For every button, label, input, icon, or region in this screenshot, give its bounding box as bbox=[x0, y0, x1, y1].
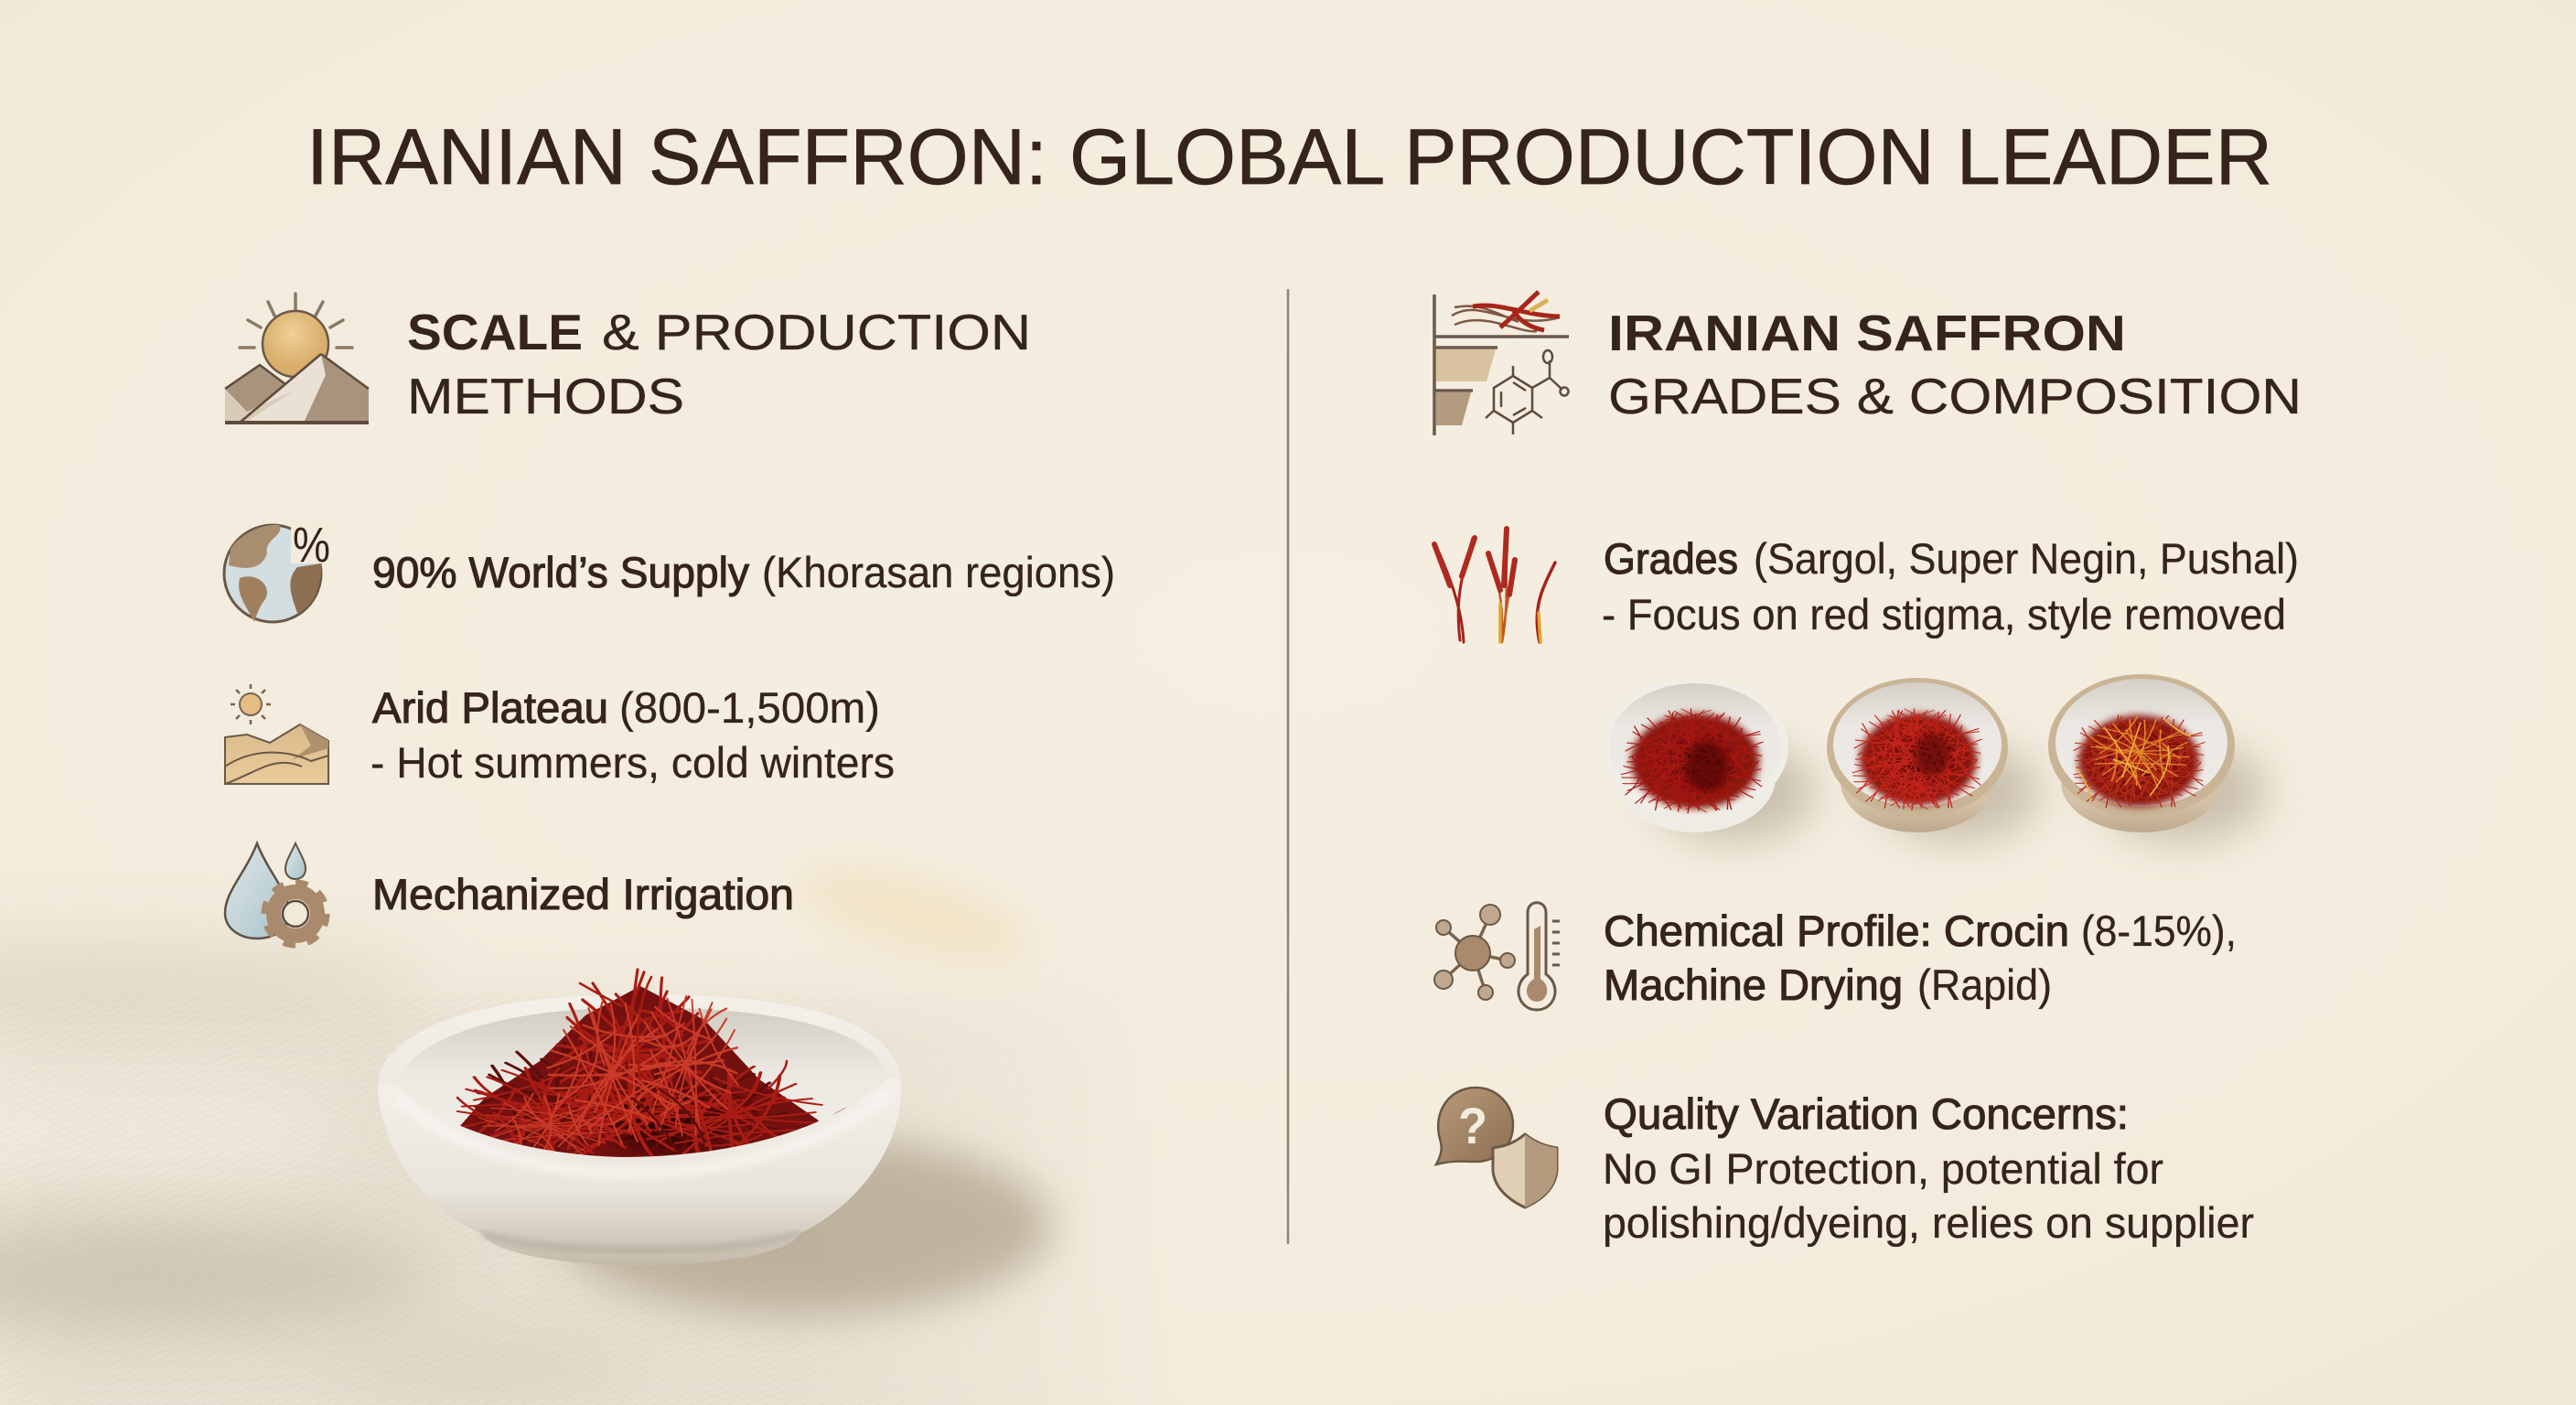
bowl: super negin bbox=[1827, 678, 2040, 842]
text: arid plateau bbox=[370, 683, 895, 787]
saffron mound bbox=[429, 970, 864, 1182]
golden light glow bbox=[791, 851, 1038, 979]
text: quality variation concerns: polishing/dyeing, relies on supplier bbox=[1603, 1198, 2254, 1247]
icon: desert plateau bbox=[225, 684, 328, 784]
heading: scale and production methods: SCALE bbox=[407, 304, 583, 360]
text: chemical profile: Chemical Profile: Crocin bbox=[1604, 906, 2069, 955]
text: arid plateau: Arid Plateau bbox=[372, 683, 608, 732]
text: quality variation concerns: No GI Protection, potential for bbox=[1603, 1144, 2163, 1193]
icon: water drops and gear bbox=[225, 843, 326, 944]
text: arid plateau: (800-1,500m) bbox=[619, 683, 880, 732]
linen cloth background bbox=[0, 952, 1143, 1405]
heading: scale and production methods: METHODS bbox=[407, 368, 684, 424]
text: grades bbox=[1602, 534, 2299, 638]
text: chemical profile: (8-15%), bbox=[2081, 906, 2237, 955]
text: grades: Grades bbox=[1604, 534, 1738, 583]
bowl: pushal bbox=[2048, 674, 2266, 842]
heading: iranian saffron grades and composition: GRADES & COMPOSITION bbox=[1608, 368, 2302, 424]
text: world supply: (Khorasan regions) bbox=[762, 548, 1115, 596]
panel: grades and composition bbox=[1434, 292, 2302, 1247]
panel: scale and production methods bbox=[224, 294, 1115, 1315]
bowl: sargol bbox=[1602, 678, 1816, 842]
text: chemical profile: (Rapid) bbox=[1917, 960, 2052, 1009]
text: chemical profile bbox=[1604, 906, 2237, 1009]
text: quality variation concerns bbox=[1603, 1089, 2254, 1247]
icon: sun over mountains bbox=[225, 294, 369, 423]
text: quality variation concerns: Quality Variation Concerns: bbox=[1604, 1089, 2129, 1138]
icon: question bubble and shield bbox=[1436, 1088, 1557, 1207]
text: mechanized irrigation: Mechanized Irrigation bbox=[372, 870, 794, 918]
text: chemical profile: Machine Drying bbox=[1604, 960, 1903, 1009]
text: grades: (Sargol, Super Negin, Pushal) bbox=[1754, 534, 2299, 583]
heading: iranian saffron grades and composition: IRANIAN SAFFRON bbox=[1608, 305, 2126, 361]
title: IRANIAN SAFFRON: GLOBAL PRODUCTION LEADER bbox=[306, 113, 2272, 201]
text: grades: - Focus on red stigma, style removed bbox=[1602, 590, 2286, 638]
saffron grade bowls bbox=[1602, 674, 2266, 842]
heading: iranian saffron grades and composition bbox=[1608, 305, 2302, 424]
photo: bowl of saffron on linen bbox=[378, 970, 1052, 1315]
icon: globe with percent bbox=[224, 518, 331, 622]
text: arid plateau: - Hot summers, cold winters bbox=[370, 738, 895, 787]
text: world supply: 90% World’s Supply bbox=[372, 548, 749, 596]
heading: scale and production methods: & PRODUCTION bbox=[602, 304, 1031, 360]
divider bbox=[1287, 289, 1289, 1244]
heading: scale and production methods bbox=[407, 304, 1031, 424]
icon: saffron threads bbox=[1434, 529, 1555, 642]
icon: molecule and thermometer bbox=[1434, 903, 1560, 1010]
icon: globe with percent: % bbox=[293, 518, 330, 573]
text: world supply bbox=[372, 548, 1115, 596]
icon: question bubble and shield: ? bbox=[1458, 1097, 1487, 1154]
icon: saffron shelf and molecule bbox=[1434, 292, 1569, 435]
